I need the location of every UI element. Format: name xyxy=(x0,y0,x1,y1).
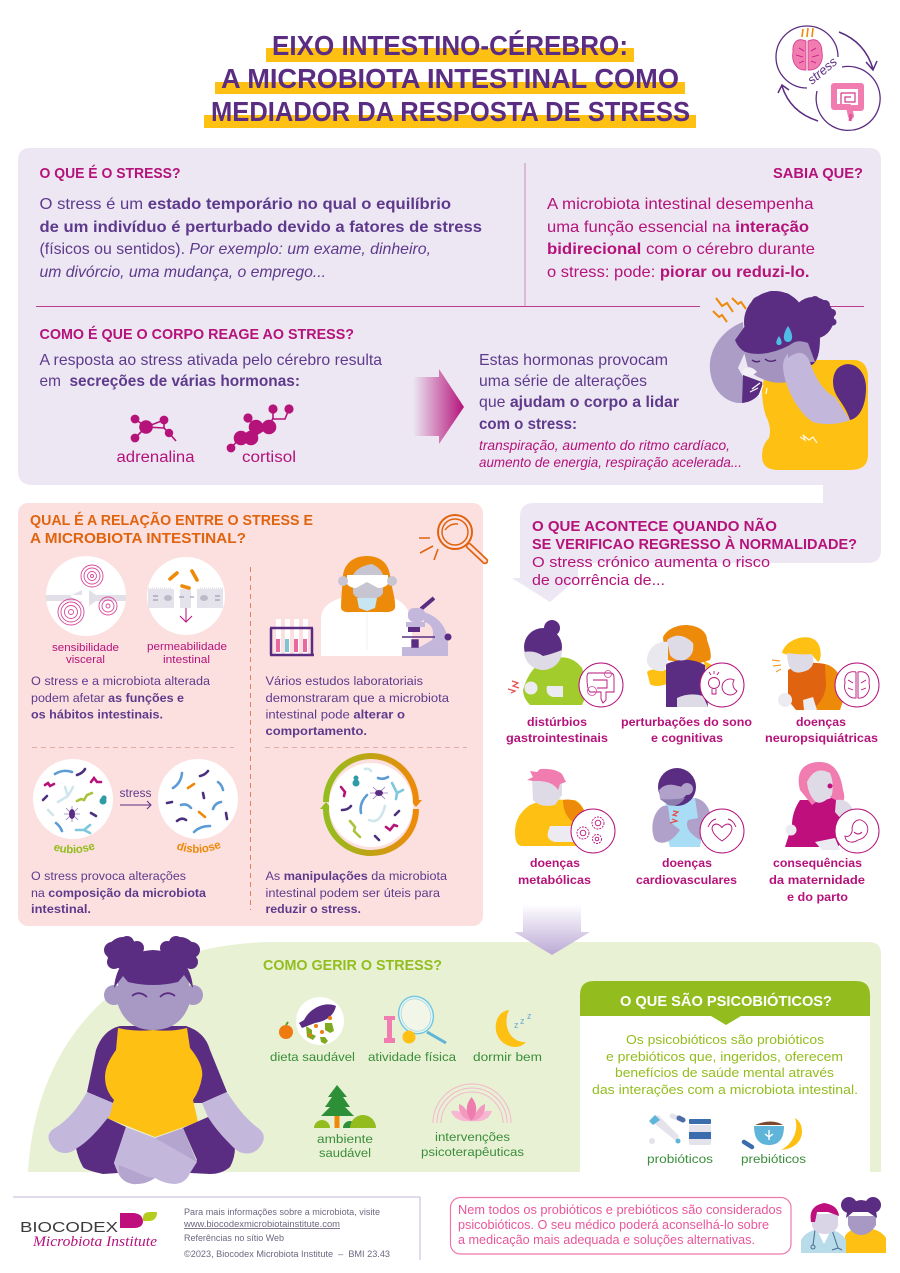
label: stress arrow: stress xyxy=(120,786,152,800)
label: eubiose: eubiose xyxy=(54,844,95,854)
label: cardio xyxy=(636,856,737,887)
heading: relation xyxy=(30,511,313,547)
icon: probiotics xyxy=(649,1115,711,1145)
figure: sleep and cognition xyxy=(647,625,744,707)
label: sono xyxy=(621,715,752,745)
text: functions and habits: O stress e a microbiota alterada xyxy=(31,674,210,688)
label: sensibilidade visceral: visceral xyxy=(66,654,105,666)
panel: psychobiotics xyxy=(580,981,870,1172)
label: sono: e cognitivas xyxy=(651,731,723,745)
illustration: stressed woman xyxy=(710,291,868,470)
text: stress definition: de um indivíduo é perturbado devido a fatores de stress xyxy=(40,219,482,236)
icon: brain gut stress cycle xyxy=(776,26,880,130)
label: permeabilidade intestinal: intestinal xyxy=(163,654,210,666)
text: chronic stress: O stress crónico aumenta o risco xyxy=(532,555,770,571)
text: definition xyxy=(592,1032,858,1097)
text: manipulations xyxy=(266,869,447,916)
illustration: meditating woman xyxy=(48,936,264,1184)
label: metabolic: doenças xyxy=(530,856,580,870)
text: effect examples xyxy=(479,438,742,470)
text: contact and references: Para mais informações sobre a microbiota, visite xyxy=(184,1207,380,1217)
figure: neuropsychiatric xyxy=(772,637,879,710)
label: sono: perturbações do sono xyxy=(621,715,752,729)
icon: intestinal permeability xyxy=(147,557,225,635)
text: composition xyxy=(31,869,206,916)
icon: eubiosis circle xyxy=(33,759,113,839)
label: ambiente: ambiente xyxy=(317,1132,373,1146)
text: did you know: uma função essencial na interação xyxy=(547,219,809,236)
figure: gastrointestinal xyxy=(508,620,623,707)
title: EIXO INTESTINO-CÉREBRO: xyxy=(272,30,628,61)
heading: o que é o stress: O QUE É O STRESS? xyxy=(40,165,180,182)
footer: info block xyxy=(13,1197,420,1260)
icon: prebiotics xyxy=(744,1118,802,1150)
label: atividade: atividade física xyxy=(368,1050,456,1064)
label: intervenções: intervenções xyxy=(435,1130,510,1144)
text: did you know xyxy=(547,196,815,281)
text: lab studies: intestinal pode alterar o xyxy=(266,708,405,722)
text: hormones xyxy=(40,352,382,390)
label: cortisol: cortisol xyxy=(242,449,296,466)
heading: relation: QUAL É A RELAÇÃO ENTRE O STRESS E xyxy=(30,511,313,529)
text: hormone effects: Estas hormonas provocam xyxy=(479,352,668,369)
text: contact and references xyxy=(183,1207,390,1259)
icon: visceral sensitivity xyxy=(46,556,126,636)
heading: what happens: O QUE ACONTECE QUANDO NÃO xyxy=(532,517,777,535)
figure: maternity xyxy=(785,762,879,853)
label: dormir: dormir bem xyxy=(473,1050,542,1064)
text: manipulations: intestinal podem ser úteis para xyxy=(266,886,440,900)
text: stress definition: O stress é um estado temporário no qual o equilíbrio xyxy=(40,196,451,213)
text: hormone effects: com o stress: xyxy=(479,416,577,433)
text: lab studies xyxy=(266,674,449,738)
label: intervenções: psicoterapêuticas xyxy=(421,1145,524,1159)
illustration: doctor and patient xyxy=(801,1197,886,1253)
text: hormone effects: uma série de alterações xyxy=(479,373,647,390)
icon: good sleep xyxy=(496,1010,532,1047)
text: effect examples: aumento de energia, respiração acelerada... xyxy=(479,455,742,470)
text: definition: e prebióticos que, ingeridos, oferecem xyxy=(606,1049,843,1064)
label: ambiente: saudável xyxy=(319,1146,371,1160)
panel: managing stress xyxy=(28,942,881,1172)
heading banner xyxy=(580,981,870,1025)
text: composition: O stress provoca alterações xyxy=(31,869,186,883)
label: distúrbios: distúrbios xyxy=(527,715,587,729)
heading banner: O QUE SÃO PSICOBIÓTICOS? xyxy=(620,992,832,1010)
logo: biocodex: BIOCODEX xyxy=(20,1219,118,1236)
arrow: gradient down xyxy=(514,904,590,955)
icon: bulb moon badge xyxy=(700,663,744,707)
title: MEDIADOR DA RESPOSTA DE STRESS xyxy=(211,96,690,127)
label: neuro xyxy=(765,715,878,745)
text: composition: na composição da microbiota xyxy=(31,886,206,900)
heading: what happens: SE VERIFICAO REGRESSO À NORMALIDADE? xyxy=(532,536,857,553)
icon: lotus and rainbow xyxy=(433,1084,511,1123)
label: maternity xyxy=(769,856,865,904)
callout: medical advice xyxy=(450,1198,791,1254)
heading: como reage: COMO É QUE O CORPO REAGE AO STRESS? xyxy=(40,326,354,343)
label: cardio: doenças xyxy=(662,856,712,870)
label: distúrbios xyxy=(506,715,608,745)
text: chronic stress: de ocorrência de... xyxy=(532,573,665,589)
icon: magnifying glass xyxy=(419,515,485,561)
icon: heart badge xyxy=(700,809,744,853)
logo: biocodex: Microbiota Institute xyxy=(32,1234,157,1250)
icon: microbiota ring xyxy=(320,756,422,853)
label: dieta: dieta saudável xyxy=(270,1050,355,1064)
text: definition: benefícios de saúde mental através xyxy=(615,1065,835,1080)
label: permeabilidade intestinal xyxy=(147,641,227,666)
label: metabolic: metabólicas xyxy=(518,873,591,887)
text: contact and references: ©2023, Biocodex Microbiota Institute – BMI 23.43 xyxy=(184,1249,390,1259)
label: metabolic xyxy=(518,856,591,887)
label: prebióticos: prebióticos xyxy=(741,1152,806,1166)
text: stress definition: um divórcio, uma mudança, o emprego... xyxy=(40,264,326,281)
arrow: bubble pointer xyxy=(512,563,578,602)
label: intervenções xyxy=(421,1130,524,1159)
text: did you know: o stress: pode: piorar ou reduzi-lo. xyxy=(547,264,810,281)
illustration: scientist xyxy=(270,556,452,656)
icon: brain gut stress cycle: stress xyxy=(804,54,840,87)
icon: microscope xyxy=(402,598,452,656)
text: lab studies: comportamento. xyxy=(266,724,367,738)
text: chronic stress xyxy=(532,555,770,589)
label: ambiente xyxy=(317,1132,373,1160)
icon: brain badge xyxy=(835,663,879,707)
label: maternity: da maternidade xyxy=(769,873,865,887)
text: contact and references: Referências no sítio Web xyxy=(184,1233,284,1243)
label: sensibilidade visceral: sensibilidade xyxy=(52,642,119,654)
icon: fetus badge xyxy=(835,809,879,853)
heading: como gerir: COMO GERIR O STRESS? xyxy=(263,958,442,974)
icon: healthy diet xyxy=(279,997,344,1045)
text: lab studies: demonstraram que a microbiota xyxy=(266,691,449,705)
icon: good sleep: z xyxy=(514,1020,519,1030)
text: hormones: em secreções de várias hormonas: xyxy=(40,373,300,390)
text: effect examples: transpiração, aumento do ritmo cardíaco, xyxy=(479,438,730,453)
label: distúrbios: gastrointestinais xyxy=(506,731,608,745)
callout: medical advice: psicobióticos. O seu médico poderá aconselhá-lo sobre xyxy=(458,1218,769,1232)
text: contact and references: www.biocodexmicrobiotainstitute.com xyxy=(183,1219,340,1229)
text: hormones: A resposta ao stress ativada pelo cérebro resulta xyxy=(40,352,382,369)
callout: medical advice: a medicação mais adequada e soluções alternativas. xyxy=(458,1233,755,1247)
text: hormone effects xyxy=(479,352,679,433)
text: did you know: bidirecional com o cérebro durante xyxy=(547,241,815,258)
label: maternity: consequências xyxy=(773,856,862,870)
logo: biocodex xyxy=(20,1212,157,1250)
label: permeabilidade intestinal: permeabilidade xyxy=(147,641,227,653)
text: hormone effects: que ajudam o corpo a lidar xyxy=(479,394,679,411)
text: definition: Os psicobióticos são probióticos xyxy=(626,1032,825,1047)
heading: sabia que: SABIA QUE? xyxy=(773,166,863,182)
panel: stress and microbiota xyxy=(18,503,488,926)
title xyxy=(204,30,696,128)
label: neuro: neuropsiquiátricas xyxy=(765,731,878,745)
label: disbiose: disbiose xyxy=(177,842,221,853)
icon: test tubes xyxy=(270,619,314,655)
label: maternity: e do parto xyxy=(787,890,848,904)
text: functions and habits: podem afetar as funções e xyxy=(31,691,184,705)
text: did you know: A microbiota intestinal desempenha xyxy=(547,196,814,213)
text: stress definition xyxy=(40,196,482,281)
figure: metabolic xyxy=(515,769,615,853)
label: adrenalina: adrenalina xyxy=(116,449,195,466)
icon: adrenaline molecule xyxy=(131,415,176,442)
text: functions and habits: os hábitos intestinais. xyxy=(31,708,163,722)
heading: what happens xyxy=(532,517,857,553)
icon: healthy environment xyxy=(314,1085,376,1128)
label: stress arrow xyxy=(120,786,152,809)
text: manipulations: reduzir o stress. xyxy=(266,902,361,916)
callout: medical advice: Nem todos os probióticos e prebióticos são considerados xyxy=(458,1203,782,1217)
icon: good sleep: z xyxy=(520,1016,525,1026)
icon: cortisol molecule xyxy=(227,405,293,452)
figure: cardiovascular xyxy=(652,768,744,853)
arrow: gradient right xyxy=(413,369,464,444)
label: neuro: doenças xyxy=(796,715,846,729)
text: functions and habits xyxy=(31,674,210,722)
icon: gears badge xyxy=(571,809,615,853)
label: probióticos: probióticos xyxy=(647,1152,713,1166)
label: sensibilidade visceral xyxy=(52,642,119,666)
text: manipulations: As manipulações da microbiota xyxy=(266,869,447,883)
text: lab studies: Vários estudos laboratoriais xyxy=(266,674,423,688)
icon: good sleep: z xyxy=(527,1011,532,1021)
icon: physical activity xyxy=(384,991,446,1044)
panel: what is stress xyxy=(18,148,881,563)
icon: gut badge xyxy=(579,663,623,707)
icon: dysbiosis circle xyxy=(158,759,238,839)
text: composition: intestinal. xyxy=(31,902,91,916)
label: cardio: cardiovasculares xyxy=(636,873,737,887)
title: A MICROBIOTA INTESTINAL COMO xyxy=(221,63,679,94)
text: definition: das interações com a microbiota intestinal. xyxy=(592,1082,858,1097)
heading: relation: A MICROBIOTA INTESTINAL? xyxy=(30,531,246,547)
text: stress definition: (físicos ou sentidos). Por exemplo: um exame, dinheiro, xyxy=(40,241,431,258)
